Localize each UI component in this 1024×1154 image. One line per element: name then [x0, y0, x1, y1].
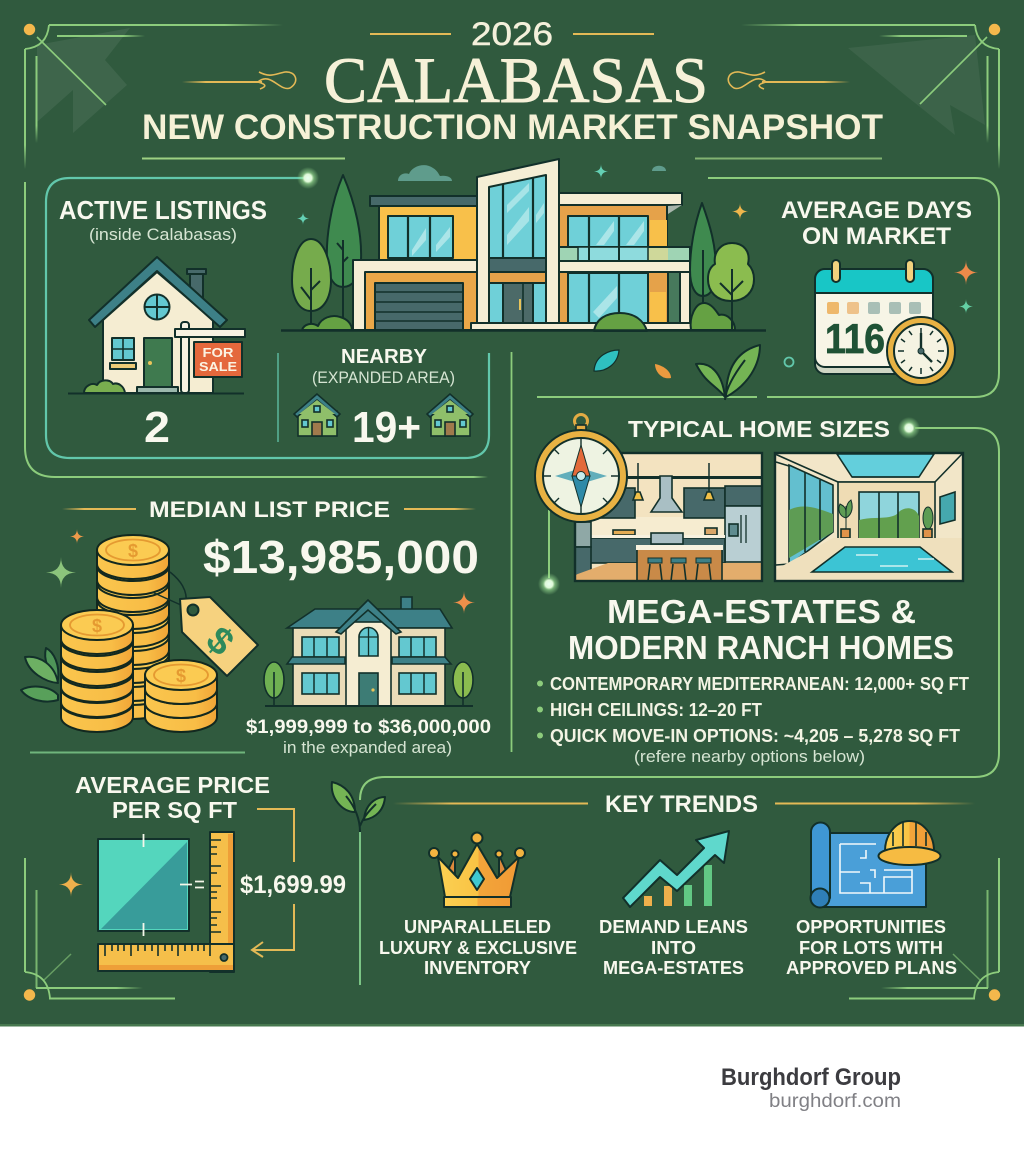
heading: mega-estates: MEGA-ESTATES & [607, 593, 916, 630]
icon: sprout [332, 782, 385, 832]
icon: coin stacks and price tag: $ [92, 616, 102, 636]
trend text: luxury [379, 917, 577, 978]
illustration: pool room [775, 453, 963, 581]
cloud [398, 165, 452, 181]
panel frame: outer left green [25, 182, 430, 477]
section: average price per sq ft: PER SQ FT [112, 797, 237, 823]
decorative leaves and sprout [594, 345, 794, 400]
section: active listings text: (inside Calabasas) [89, 225, 237, 244]
left block [370, 196, 477, 206]
footer brand: burghdorf.com [769, 1090, 901, 1112]
icon: for sale house [68, 257, 245, 394]
corner ornament: top right [741, 24, 1000, 169]
year: 2026 [471, 16, 553, 52]
trend text: demand [599, 917, 748, 978]
text: price range [246, 717, 491, 757]
bullet list: HIGH CEILINGS: 12–20 FT [550, 700, 762, 720]
section: average days on market [781, 197, 978, 385]
trend text: lots [786, 917, 957, 978]
panel frame: days on market [537, 178, 999, 397]
section: nearby: NEARBY [341, 346, 428, 368]
icon: crown [429, 832, 525, 907]
bullet list: CONTEMPORARY MEDITERRANEAN: 12,000+ SQ FT [550, 674, 969, 694]
value: median price: $13,985,000 [203, 531, 479, 583]
section: typical home sizes [535, 414, 969, 766]
trend text: luxury: INVENTORY [424, 958, 531, 978]
icon: trend arrow chart [623, 831, 729, 907]
trend text: lots: OPPORTUNITIES [796, 917, 946, 937]
trend text: luxury: LUXURY & EXCLUSIVE [379, 938, 577, 958]
section: average days on market: AVERAGE DAYS [781, 197, 972, 224]
base slab [471, 323, 700, 330]
icon: compass [535, 414, 627, 522]
footer brand: Burghdorf Group [721, 1064, 901, 1091]
corner ornament: bottom left [24, 858, 175, 1001]
central tower [477, 159, 559, 324]
corner ornament: top left [24, 24, 283, 169]
panel frame: active listings teal [46, 167, 489, 458]
section: typical home sizes: TYPICAL HOME SIZES [628, 416, 890, 442]
icon: small house left [294, 394, 340, 436]
section: average price per sq ft: AVERAGE PRICE [75, 772, 270, 798]
corner ornament: bottom right [849, 858, 1000, 1001]
section: average days on market: ON MARKET [802, 223, 951, 250]
icon: calendar [815, 260, 955, 385]
section: typical home sizes: MODERN RANCH HOMES [568, 629, 954, 666]
trend text: lots: FOR LOTS WITH [799, 938, 943, 958]
icon: square and ruler [98, 832, 234, 972]
right trees [690, 203, 716, 296]
bullet list: QUICK MOVE-IN OPTIONS: ~4,205 – 5,278 SQ FT [550, 726, 960, 746]
section: average price per sq ft: $1,699.99 [240, 871, 346, 899]
section: active listings text [59, 195, 267, 452]
icon: blueprint and hard hat [810, 821, 940, 908]
arrow: bracket to price [252, 809, 294, 957]
text: price range: in the expanded area) [283, 738, 452, 757]
trend text: demand: MEGA-ESTATES [603, 958, 744, 978]
city name: CALABASAS [324, 45, 708, 117]
section: active listings text: 2 [144, 403, 170, 452]
icon: mansion [264, 597, 473, 706]
trend text: demand: DEMAND LEANS [599, 917, 748, 937]
panel frame: home sizes [360, 352, 999, 985]
illustration: kitchen [575, 453, 762, 581]
icon: calendar: 116 [825, 315, 885, 362]
illustration: modern house [281, 159, 766, 331]
section: nearby: 19+ [352, 403, 421, 452]
text: price range: $1,999,999 to $36,000,000 [246, 717, 491, 738]
section: nearby: (EXPANDED AREA) [312, 369, 455, 387]
trend text: luxury: UNPARALLELED [404, 917, 551, 937]
icon: coin stacks and price tag: $ [198, 619, 242, 664]
icon: small house right [427, 394, 473, 436]
bullet list [537, 674, 969, 766]
icon: coin stacks and price tag: $ [176, 666, 186, 686]
icon: for sale house: SALE [199, 360, 237, 374]
icon: clock [887, 317, 955, 385]
title block [142, 16, 883, 160]
icon: for sale house: FOR [202, 346, 234, 360]
trend text: demand: INTO [651, 938, 696, 958]
section: key trends [379, 791, 975, 978]
trend text: lots: APPROVED PLANS [786, 958, 957, 978]
footer brand [721, 1064, 901, 1112]
subtitle: NEW CONSTRUCTION MARKET SNAPSHOT [142, 108, 883, 147]
section: nearby [294, 346, 473, 452]
bullet list: (refere nearby options below) [634, 748, 865, 766]
icon: coin stacks and price tag: $ [128, 541, 138, 561]
icon: coin stacks and price tag [21, 529, 475, 732]
section: average price per sq ft [59, 772, 346, 972]
right block [559, 193, 682, 205]
heading: median list price: MEDIAN LIST PRICE [149, 497, 390, 522]
left trees [327, 175, 361, 287]
section: active listings text: ACTIVE LISTINGS [59, 195, 267, 225]
section: key trends: KEY TRENDS [605, 791, 758, 818]
